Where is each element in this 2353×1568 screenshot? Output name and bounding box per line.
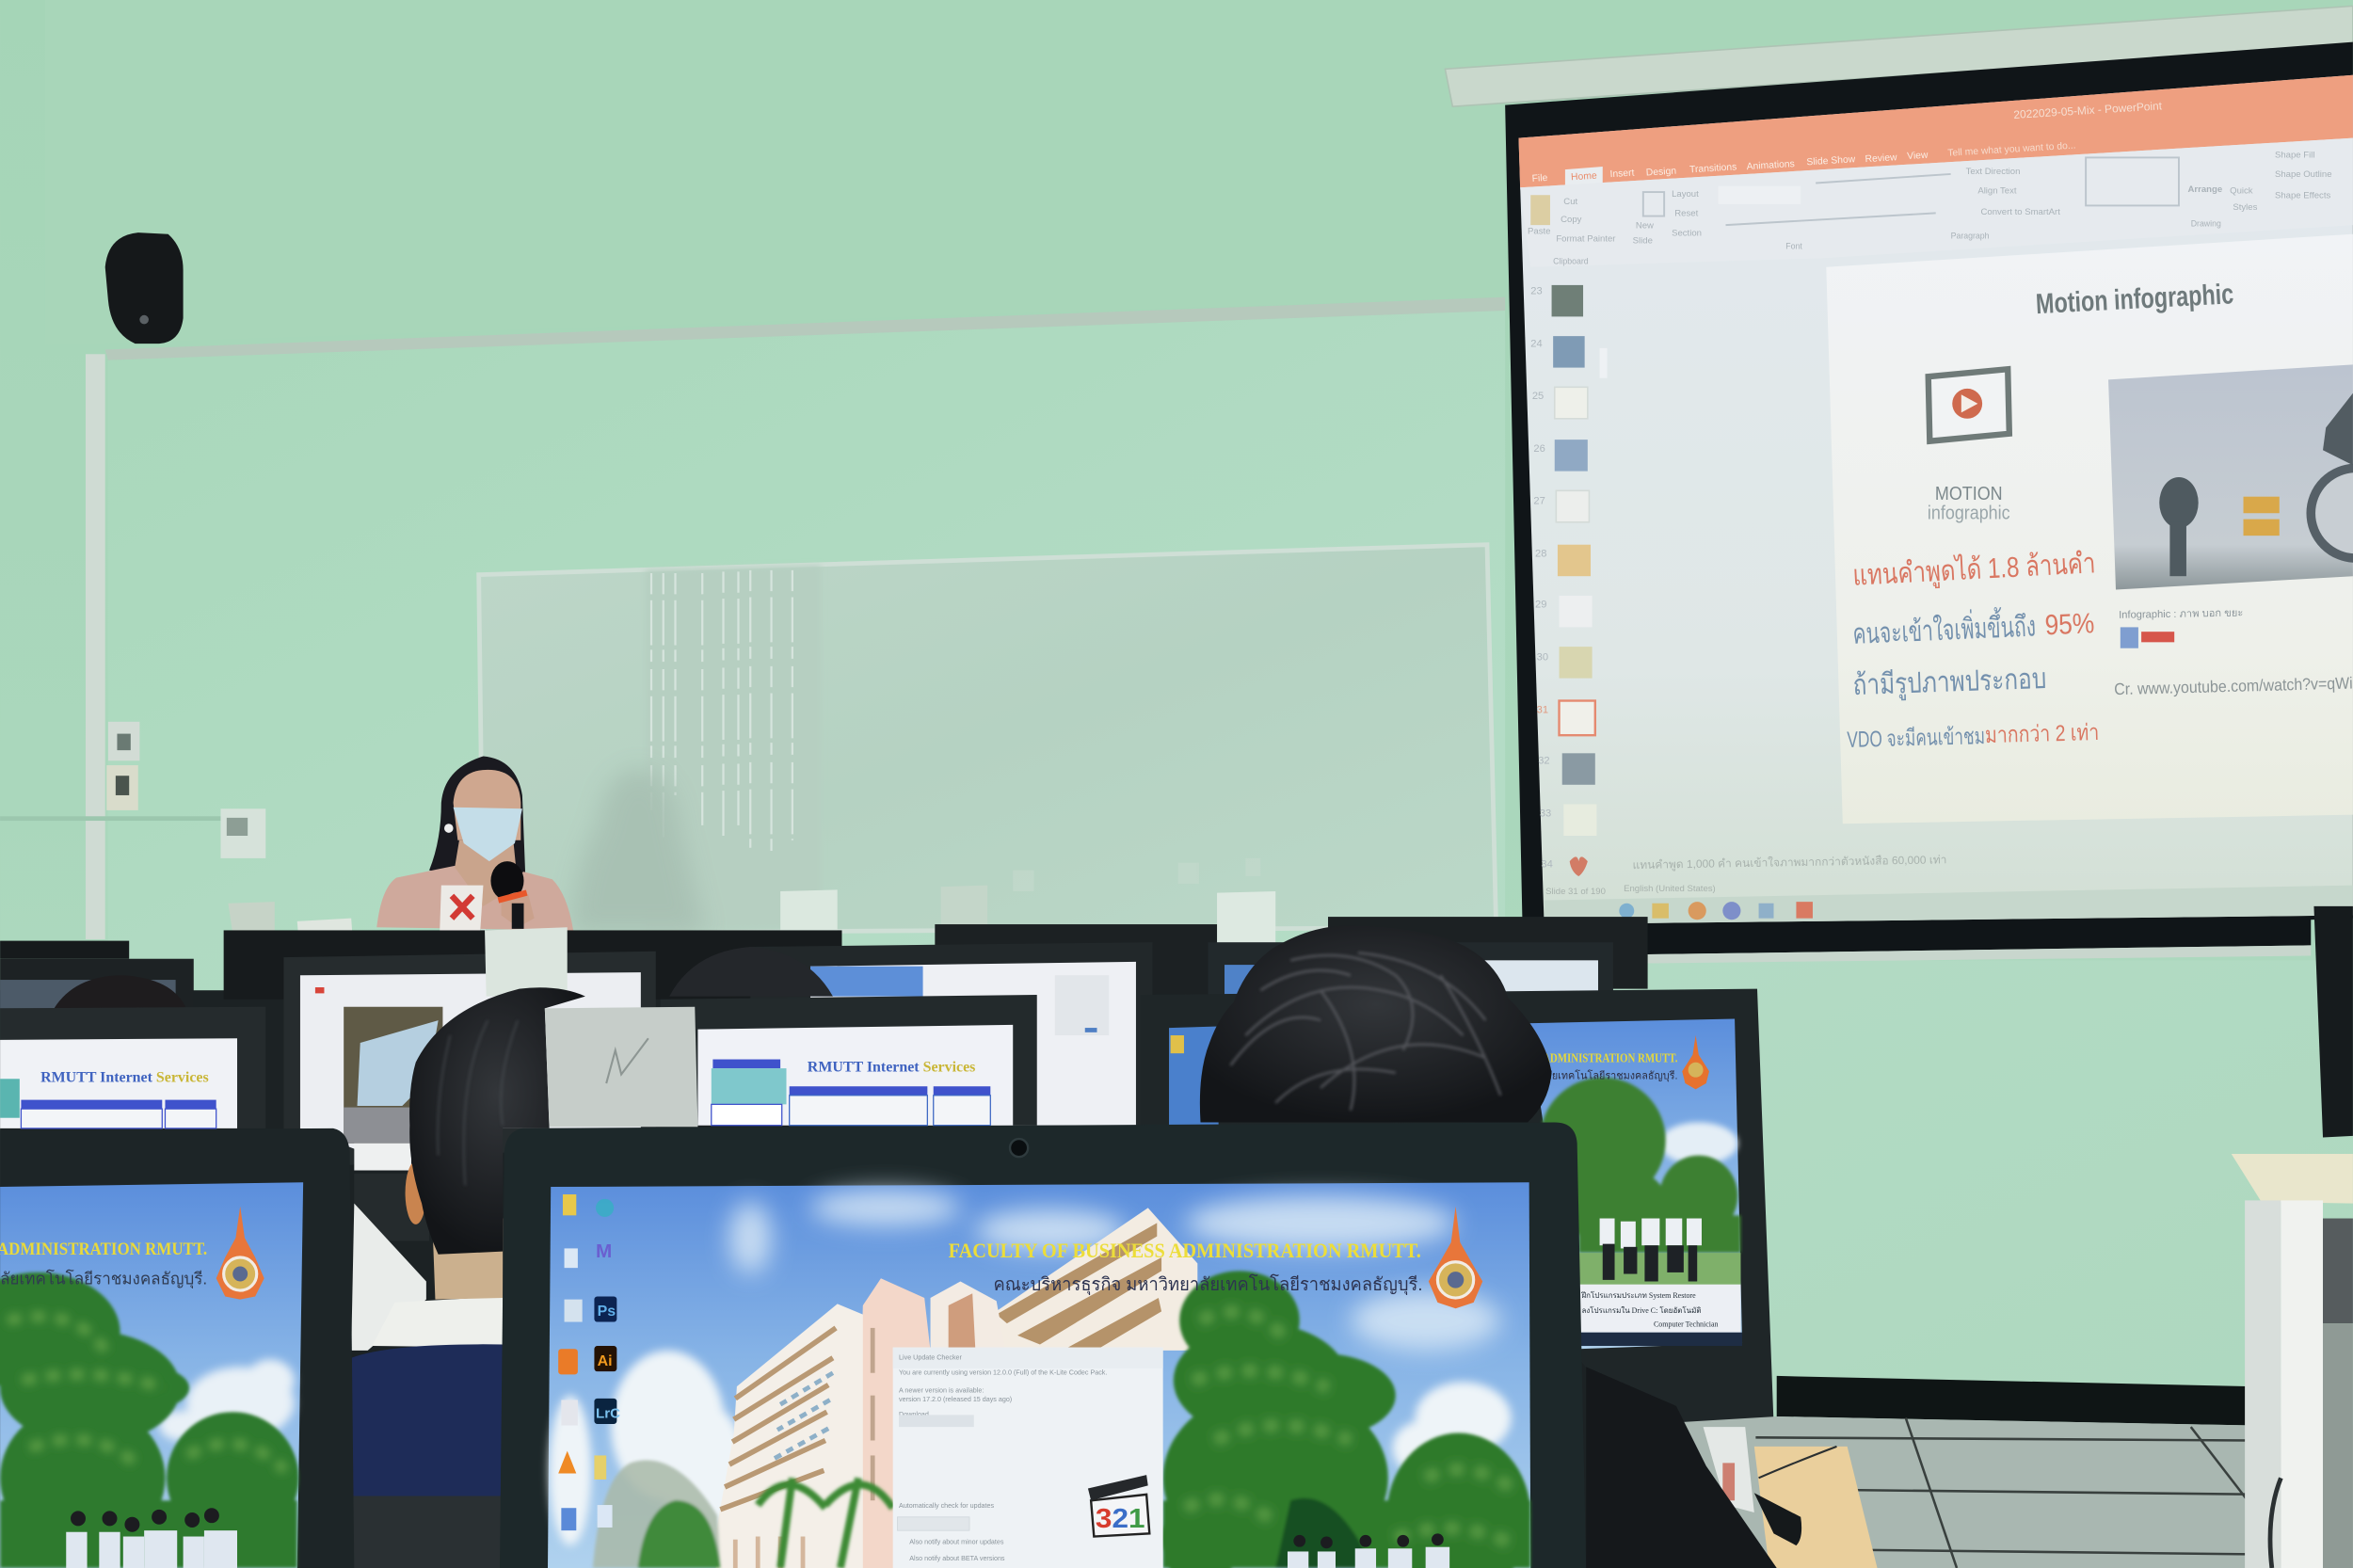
floor tiles: [1651, 1416, 2353, 1568]
projected desktop: [1518, 75, 2353, 924]
lower dark backdrop behind monitors: [0, 990, 1651, 1568]
wallpaper building: [716, 1208, 1197, 1568]
presenter blouse: [376, 866, 573, 930]
powerpoint ribbon: Font: [1785, 242, 1802, 251]
wallpaper clouds: [550, 1351, 1512, 1553]
dialog: update checker: You are currently using version 12.0.0 (Full) of the K-Lite Codec Pack.: [899, 1368, 1107, 1376]
powerpoint ribbon: Arrange: [2188, 184, 2222, 195]
icon: video play: [1929, 369, 2009, 441]
face mask: [454, 808, 522, 861]
screen black frame: [1505, 42, 2353, 957]
icon: wall speaker: [105, 232, 184, 344]
powerpoint ribbon: New: [1636, 220, 1654, 231]
monitor: centre middle: RMUTT Internet Services: [808, 1059, 975, 1075]
powerpoint ribbon: Styles: [2233, 202, 2258, 213]
powerpoint title bar: Home: [1571, 171, 1597, 183]
presenter: [376, 757, 573, 930]
back row monitors: [0, 917, 1648, 1008]
powerpoint ribbon: Shape Effects: [2275, 190, 2330, 200]
dialog: update checker: Live Update Checker: [899, 1353, 963, 1361]
powerpoint ribbon: Copy: [1561, 215, 1582, 225]
powerpoint ribbon: Align Text: [1977, 186, 2017, 197]
slide thumbnails: 24: [1530, 338, 1543, 349]
desktop icons: [558, 1194, 620, 1530]
head far left: [54, 975, 186, 1008]
wallpaper students: [1578, 1219, 1740, 1286]
slide thumbnails: 25: [1532, 391, 1544, 402]
middle gable: [931, 1281, 1005, 1351]
wallpaper: [1528, 1019, 1742, 1349]
wallpaper notice: [1578, 1285, 1740, 1333]
white device: [1704, 1427, 1754, 1512]
powerpoint title bar: Review: [1865, 152, 1897, 165]
panel: projector screen: [1505, 42, 2353, 964]
desk name cards and papers: [228, 886, 1275, 960]
wall baseboard: [1777, 1376, 2252, 1426]
slide thai text lines: [1847, 546, 2100, 753]
wallpaper title: FACULTY OF BUSINESS ADMINISTRATION RMUTT.: [949, 1239, 1421, 1262]
microphone and hand: [490, 861, 535, 929]
powerpoint title bar: Animations: [1746, 159, 1795, 172]
palm trees: [758, 1478, 893, 1568]
powerpoint ribbon: Layout: [1672, 189, 1699, 200]
dialog: update checker: Also notify about minor updates: [909, 1538, 1004, 1545]
wallpaper sky: [548, 1182, 1530, 1568]
slide title: Motion infographic: [2035, 279, 2234, 320]
powerpoint ribbon: Slide: [1633, 235, 1653, 246]
light strip below screen: [1648, 945, 2311, 964]
powerpoint title bar: Tell me what you want to do...: [1947, 140, 2076, 159]
slide thumbnails: 23: [1530, 285, 1543, 296]
slide thumbnails: 28: [1535, 548, 1546, 559]
dialog: update checker: Download: [899, 1411, 929, 1418]
video credit: [2114, 608, 2353, 698]
wallpaper trees: [593, 1271, 1530, 1568]
monitor: front left: [0, 1128, 354, 1568]
lower wall panel: [108, 311, 2353, 1388]
powerpoint ribbon: Reset: [1674, 209, 1699, 219]
left wing: [716, 1304, 863, 1568]
presenter hair: [429, 757, 525, 886]
monitor: browser window centre back: [750, 942, 1152, 1126]
powerpoint ribbon: [1520, 138, 2353, 267]
shirt collar: [372, 1296, 503, 1348]
pink block: [856, 1278, 931, 1568]
monitor: far left middle: [0, 1007, 265, 1128]
desktop icons: Ps: [598, 1304, 616, 1320]
paper card with signature: [545, 1007, 697, 1127]
monitor: right back with wallpaper: ฝึกโปรแกรมประเภท System Restore: [1580, 1290, 1696, 1300]
wooden desk with mouse: [1704, 1427, 1878, 1568]
slide thumbnails: 33: [1540, 808, 1551, 819]
monitor: right back with wallpaper: Computer Technician: [1654, 1320, 1719, 1328]
powerpoint ribbon: Cut: [1563, 197, 1578, 207]
red x name card: [440, 886, 483, 930]
dialog: update checker: A newer version is available:: [899, 1386, 984, 1394]
powerpoint ribbon: Text Direction: [1966, 167, 2020, 177]
motion infographic label: MOTION: [1935, 483, 2003, 504]
cloud: [159, 1359, 295, 1440]
monitor: right back with wallpaper: ADMINISTRATION RMUTT.: [1543, 1051, 1677, 1065]
powerpoint ribbon: Format Painter: [1556, 234, 1616, 245]
presenter neck: [455, 840, 518, 906]
powerpoint title bar: Transitions: [1689, 162, 1737, 175]
speaker notes and status bar: Slide 31 of 190: [1545, 887, 1606, 897]
powerpoint title bar: 2022029-05-Mix - PowerPoint: [2013, 99, 2163, 121]
speaker notes and status bar: [1545, 853, 1947, 897]
powerpoint ribbon: Clipboard: [1553, 257, 1589, 266]
slide thumbnails: 31: [1537, 704, 1548, 715]
monitor: left middle: [283, 952, 656, 1171]
powerpoint ribbon: Convert to SmartArt: [1981, 207, 2060, 217]
dialog: update checker: [893, 1348, 1163, 1568]
slide thai text lines: มากกว่า 2 เท่า: [1985, 720, 2100, 748]
embedded video: [2108, 364, 2353, 590]
powerpoint title bar: Insert: [1609, 168, 1635, 180]
powerpoint title bar: File: [1531, 173, 1548, 184]
slide thumbnails: 34: [1541, 858, 1553, 870]
neck: [432, 1219, 503, 1300]
whiteboard: [479, 545, 1497, 934]
monitor: right edge: [2313, 906, 2353, 1137]
wallpaper students: [66, 1508, 237, 1568]
university emblem: [1429, 1207, 1482, 1308]
slide thai text lines: แทนคำพูดได้ 1.8 ล้านคำ: [1852, 546, 2096, 593]
right tower: [979, 1208, 1197, 1351]
icon: 321 clapperboard: [1088, 1475, 1149, 1537]
slide thumbnails: 26: [1533, 443, 1545, 455]
slide thumbnails: 32: [1538, 755, 1550, 766]
dialog: update checker: Automatically check for updates: [899, 1502, 995, 1510]
monitor: centre middle: [661, 995, 1037, 1126]
webcam: [1010, 1139, 1028, 1157]
projector screen housing: [1445, 6, 2353, 106]
powerpoint title bar: View: [1907, 151, 1929, 162]
main slide: [1826, 234, 2353, 824]
wallpaper thai subtitle: คณะบริหารธุรกิจ มหาวิทยาลัยเทคโนโลยีราชมงคลธัญบุรี.: [994, 1273, 1422, 1296]
monitor: far left middle: RMUTT Internet Services: [40, 1069, 209, 1085]
slide thumbnails: 29: [1535, 600, 1546, 611]
paper card on monitor: [485, 927, 568, 997]
monitor: right back with wallpaper: ลงโปรแกรมใน Drive C: โดยอัตโนมัติ: [1581, 1305, 1702, 1315]
powerpoint ribbon: Paste: [1528, 227, 1550, 237]
speaker notes and status bar: แทนคำพูด 1,000 คำ คนเข้าใจภาพมากกว่าตัวหนังสือ 60,000 เท่า: [1632, 853, 1947, 872]
shirt sleeve: [351, 1204, 426, 1351]
navy sweater: [351, 1344, 503, 1496]
wall conduit and controls: [0, 354, 265, 939]
icon: 321 clapperboard: 321: [1096, 1504, 1145, 1534]
person: dark shirt shoulder: [1586, 1367, 1777, 1568]
powerpoint title bar: Slide Show: [1806, 154, 1856, 168]
slide thai text lines: 95%: [2044, 608, 2095, 641]
hair: [409, 987, 585, 1255]
presenter face: [454, 770, 520, 840]
chair: [351, 1496, 503, 1568]
dialog: update checker: Also notify about BETA versions: [909, 1555, 1005, 1562]
upper wall bulkhead: [45, 0, 2353, 360]
wallpaper emblem: [216, 1207, 264, 1300]
monitor: front centre: [500, 1123, 1586, 1568]
monitor: right back with wallpaper: [1141, 989, 1774, 1424]
slide thai text lines: ถ้ามีรูปภาพประกอบ: [1852, 664, 2047, 702]
powerpoint ribbon: Shape Fill: [2275, 150, 2314, 160]
powerpoint ribbon: Paragraph: [1951, 231, 1990, 240]
earring: [444, 824, 454, 833]
person: student right, hair: [1200, 926, 1552, 1123]
ear: [406, 1161, 426, 1224]
monitor: right back with wallpaper: ลัยเทคโนโลยีราชมงคลธัญบุรี.: [1545, 1068, 1677, 1081]
dialog: update checker: Once per 3 months: [901, 1520, 958, 1528]
person: student left: [351, 987, 585, 1568]
desktop icons: Ai: [598, 1353, 613, 1369]
desktop icons: M: [596, 1240, 612, 1262]
monitor: front left: ADMINISTRATION RMUTT.: [0, 1240, 207, 1259]
speaker notes and status bar: English (United States): [1624, 884, 1716, 894]
powerpoint title bar: Design: [1646, 167, 1677, 179]
motion infographic label: [1928, 483, 2010, 524]
powerpoint title bar: [1518, 75, 2353, 187]
monitor: front left: ลัยเทคโนโลยีราชมงคลธัญบุรี.: [0, 1270, 207, 1289]
desktop icons: LrC: [596, 1406, 620, 1422]
slide thai text lines: VDO จะมีคนเข้าชม: [1847, 724, 1985, 753]
video credit: Infographic : ภาพ บอก ขยะ: [2119, 608, 2243, 621]
keyboard shadow: [354, 1174, 429, 1240]
powerpoint ribbon: Drawing: [2191, 219, 2221, 229]
heads behind centre: [669, 947, 833, 997]
slide thumbnails: 30: [1537, 651, 1548, 663]
wallpaper emblem: [1682, 1035, 1709, 1089]
wallpaper trees: [0, 1272, 298, 1568]
windows taskbar: [1545, 886, 2353, 924]
slide thumbnails: [1530, 285, 1608, 876]
slide thumbnails: 27: [1533, 496, 1545, 507]
motion infographic label: infographic: [1928, 503, 2010, 524]
dialog: update checker: version 17.2.0 (released 15 days ago): [899, 1396, 1012, 1403]
powerpoint ribbon: Quick: [2230, 186, 2253, 197]
powerpoint ribbon: Shape Outline: [2275, 169, 2332, 180]
powerpoint ribbon: Section: [1672, 228, 1702, 238]
white side table: [2232, 1154, 2353, 1568]
bezel: [500, 1123, 1586, 1568]
slide thai text lines: คนจะเข้าใจเพิ่มขึ้นถึง: [1852, 605, 2037, 650]
students in wallpaper: [1288, 1533, 1449, 1568]
